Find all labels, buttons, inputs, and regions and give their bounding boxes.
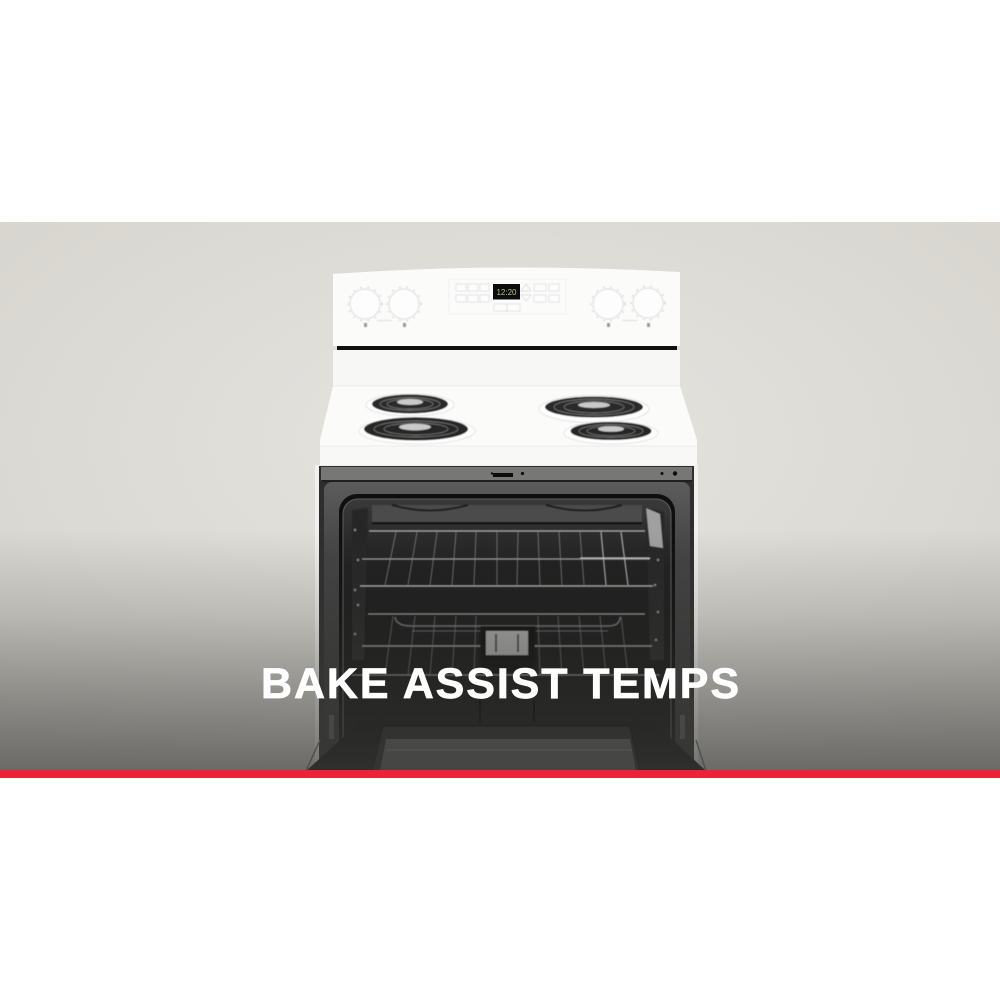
upper oven rack (360, 531, 653, 586)
oven ceiling and broil element (372, 505, 642, 523)
cooktop (320, 386, 697, 465)
display (493, 284, 520, 300)
oven body (315, 465, 698, 771)
burner: front left (359, 418, 475, 444)
bottom shading gradient (0, 530, 1000, 771)
left knobs (348, 287, 421, 327)
lower oven rack with bake element (352, 614, 660, 676)
burner: rear right (539, 396, 649, 422)
open oven door (306, 700, 706, 771)
illustration: electric range (306, 267, 706, 771)
clock and touch controls (449, 279, 566, 314)
panel: background wall (0, 222, 1000, 771)
right knobs (591, 286, 665, 327)
side rack supports (352, 508, 664, 660)
oven door frame (324, 482, 690, 771)
red accent bar (0, 770, 1000, 778)
clock and touch controls: 12:20 (496, 288, 517, 297)
burner: front right (564, 422, 658, 444)
burner: rear left (366, 394, 454, 416)
title: BAKE ASSIST TEMPS (261, 660, 739, 708)
control panel backguard (333, 267, 680, 386)
